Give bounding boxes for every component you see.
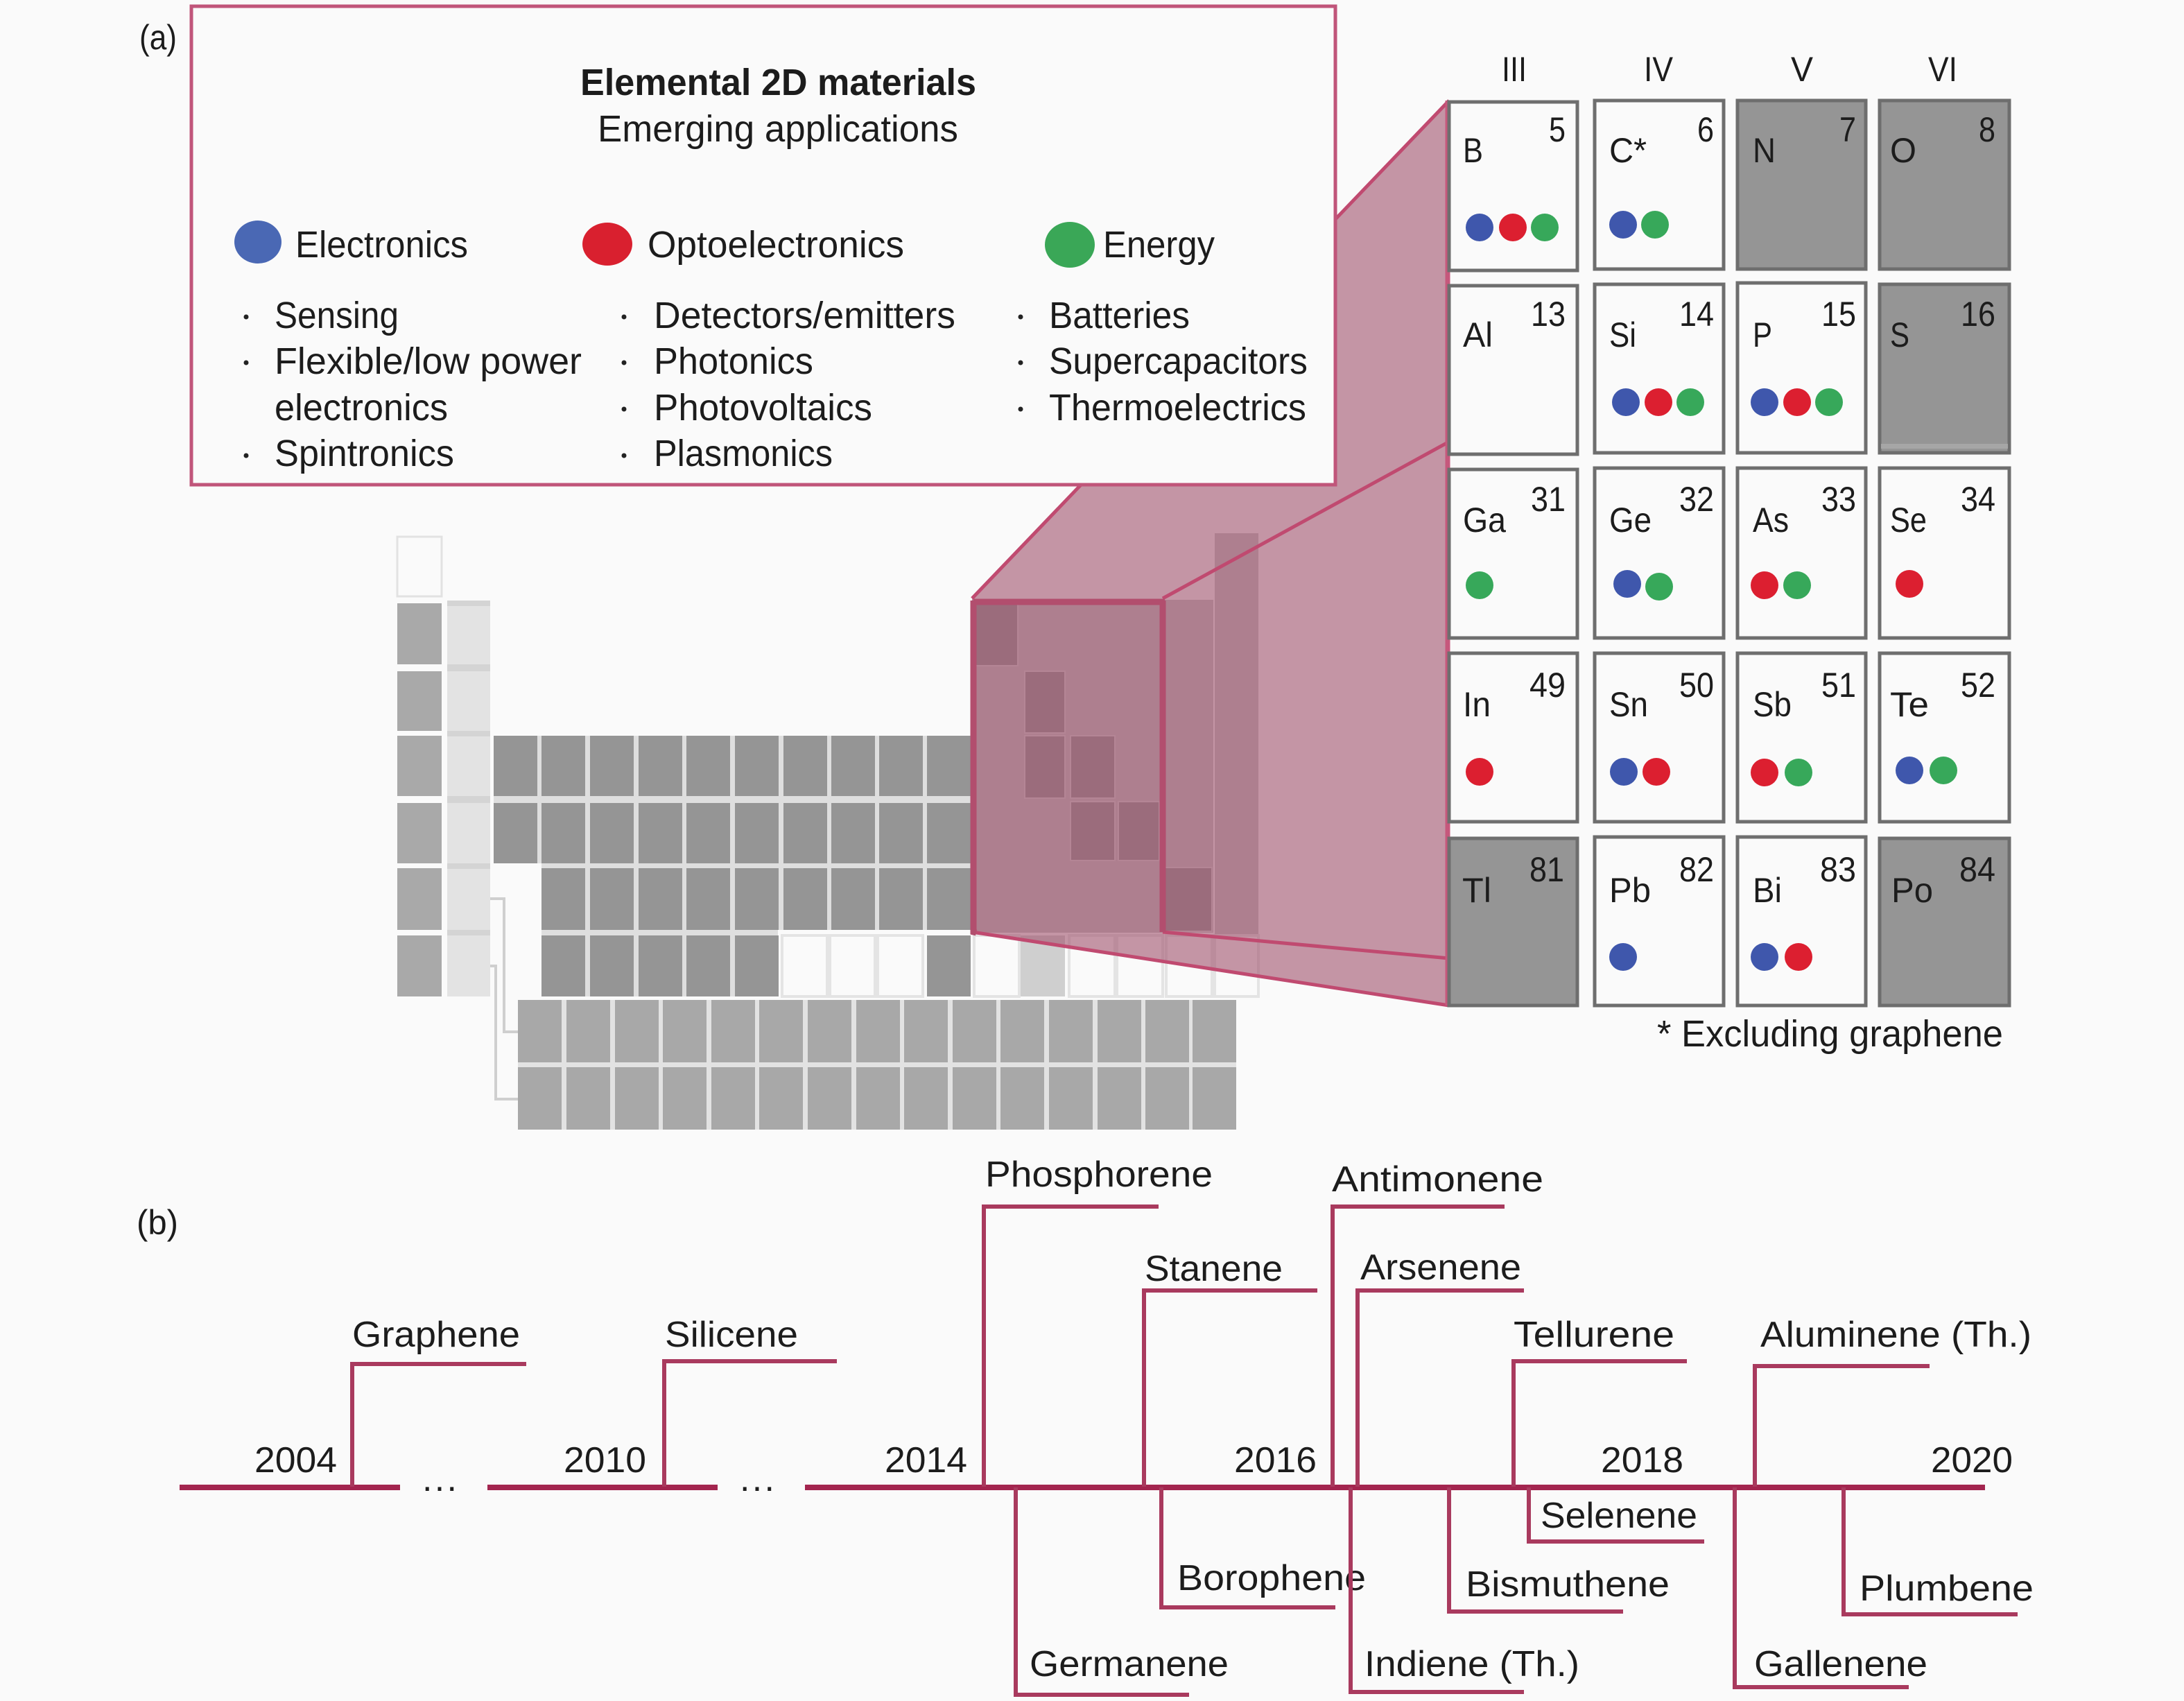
cell: O xyxy=(1880,101,2009,269)
cell: Ge xyxy=(1595,468,1724,638)
marker: Arsenene: Arsenene xyxy=(1360,1247,1521,1288)
year labels: 2004 xyxy=(254,1440,337,1480)
legend: energy: Thermoelectrics xyxy=(1049,387,1306,429)
marker: Gallenene xyxy=(1735,1487,1927,1687)
year labels: 2018 xyxy=(1601,1440,1683,1480)
prism faces xyxy=(972,101,1449,1005)
cell: Si: Si xyxy=(1609,316,1636,354)
legend: energy: Energy xyxy=(1103,224,1215,266)
ellipsis xyxy=(422,1459,774,1499)
panel: legend box xyxy=(191,6,1335,485)
legend: electronics xyxy=(234,221,582,474)
cell: Sb: Sb xyxy=(1753,685,1792,724)
marker: Indiene: Indiene (Th.) xyxy=(1364,1644,1579,1684)
cell: O: 8 xyxy=(1979,110,1995,149)
cell: Sn: Sn xyxy=(1609,685,1648,724)
f-block connector lines xyxy=(490,899,518,1099)
legend: electronics: Electronics xyxy=(295,224,468,266)
ellipsis: ... xyxy=(740,1459,774,1499)
timeline xyxy=(180,1155,2034,1695)
legend: optoelectronics: Plasmonics xyxy=(654,433,833,474)
marker: Silicene xyxy=(664,1315,837,1487)
cell: Si xyxy=(1595,284,1724,453)
marker: Tellurene: Tellurene xyxy=(1514,1315,1674,1355)
cell: Sb: 51 xyxy=(1821,666,1856,705)
cell: Pb: Pb xyxy=(1609,871,1651,910)
group headings III-VI: III xyxy=(1502,50,1527,89)
marker: Gallenene: Gallenene xyxy=(1754,1644,1927,1684)
legend: optoelectronics xyxy=(582,223,955,474)
cell: Tl xyxy=(1449,838,1577,1005)
marker: Bismuthene: Bismuthene xyxy=(1466,1564,1670,1605)
d-block cells xyxy=(494,736,972,996)
cell: As: As xyxy=(1753,501,1789,539)
cell: Sb xyxy=(1737,653,1866,822)
cell: N: N xyxy=(1753,131,1776,170)
element cell grid xyxy=(1449,101,2009,1005)
magnifying prism xyxy=(972,101,1449,1005)
year labels: 2020 xyxy=(1931,1440,2013,1480)
cell: Ga: 31 xyxy=(1531,480,1566,519)
cell: Te xyxy=(1880,653,2009,822)
ellipsis: ... xyxy=(422,1459,457,1499)
label: panel a: (a) xyxy=(139,18,177,57)
f-block grid backing xyxy=(518,1000,1236,1130)
group headings III-VI: VI xyxy=(1928,50,1957,89)
cell: Sn xyxy=(1595,653,1724,822)
cell: C: C* xyxy=(1609,131,1647,170)
legend: optoelectronics: Photonics xyxy=(654,340,813,382)
front frame xyxy=(973,601,1165,933)
year labels: 2016 xyxy=(1234,1440,1317,1480)
marker: Silicene: Silicene xyxy=(665,1315,798,1355)
year labels: 2010 xyxy=(564,1440,646,1480)
marker: Selenene: Selenene xyxy=(1541,1496,1697,1536)
marker: Plumbene: Plumbene xyxy=(1860,1569,2034,1609)
marker: Graphene xyxy=(352,1315,526,1487)
cell: In: 49 xyxy=(1529,666,1566,705)
marker: Antimonene: Antimonene xyxy=(1332,1159,1543,1200)
marker: Germanene xyxy=(1016,1487,1229,1695)
cell: Tl: Tl xyxy=(1462,871,1491,910)
cell: As xyxy=(1737,468,1866,638)
marker: Bismuthene xyxy=(1449,1487,1670,1612)
cell: C: 6 xyxy=(1697,110,1714,149)
axis segments xyxy=(180,1485,1985,1490)
cell: Ge: Ge xyxy=(1609,501,1652,539)
marker: Stanene: Stanene xyxy=(1145,1249,1283,1289)
cell: O: O xyxy=(1890,131,1916,170)
year labels xyxy=(254,1440,2013,1480)
group headings III-VI xyxy=(1502,50,1957,89)
legend: electronics: Sensing xyxy=(275,295,399,336)
group headings III-VI: IV xyxy=(1644,50,1674,89)
cell: Al: Al xyxy=(1463,316,1493,354)
cell: P xyxy=(1737,283,1866,453)
cell: Te: Te xyxy=(1890,685,1929,724)
cell: N: 7 xyxy=(1839,110,1856,149)
marker: Antimonene xyxy=(1332,1159,1543,1487)
marker: Aluminene xyxy=(1755,1315,2031,1487)
heading: Elemental 2D materials xyxy=(580,62,976,103)
p-block underlying cells xyxy=(972,600,1213,933)
legend: energy: Supercapacitors xyxy=(1049,340,1308,382)
label: panel b: (b) xyxy=(137,1203,178,1242)
cell: Sn: 50 xyxy=(1679,666,1714,705)
cell: S: 16 xyxy=(1961,295,1995,334)
cell: C xyxy=(1595,101,1724,269)
cell: Se: 34 xyxy=(1961,480,1995,519)
marker: Graphene: Graphene xyxy=(352,1315,520,1355)
cell: Tl: 81 xyxy=(1529,850,1564,889)
cell: B: 5 xyxy=(1549,110,1566,149)
marker: Germanene: Germanene xyxy=(1030,1644,1229,1684)
marker: Indiene xyxy=(1351,1487,1579,1692)
cell: B xyxy=(1449,102,1577,270)
white cells row 7 xyxy=(782,935,1258,996)
year labels: 2014 xyxy=(885,1440,967,1480)
group headings III-VI: V xyxy=(1791,50,1814,89)
cell: B: B xyxy=(1463,131,1483,170)
marker: Phosphorene: Phosphorene xyxy=(985,1155,1213,1195)
cell: Te: 52 xyxy=(1961,666,1995,705)
marker: Borophene: Borophene xyxy=(1177,1558,1366,1598)
cell: Pb: 82 xyxy=(1679,850,1714,889)
marker: Selenene xyxy=(1529,1487,1704,1542)
marker: Arsenene xyxy=(1358,1247,1524,1487)
legend: optoelectronics: Detectors/emitters xyxy=(654,295,955,336)
legend: optoelectronics: Optoelectronics xyxy=(648,224,904,266)
cell: Po: Po xyxy=(1891,871,1933,910)
cell: P: 15 xyxy=(1821,295,1856,334)
s-block column 2 xyxy=(447,601,490,996)
legend: electronics: Flexible/low power xyxy=(275,340,582,382)
marker: Aluminene: Aluminene (Th.) xyxy=(1760,1315,2031,1355)
marker: Plumbene xyxy=(1844,1487,2034,1614)
cell: P: P xyxy=(1753,316,1772,354)
cell: Ge: 32 xyxy=(1679,480,1714,519)
footnote: * Excluding graphene xyxy=(1657,1013,2003,1055)
legend: electronics: Spintronics xyxy=(275,433,454,474)
periodic table xyxy=(397,533,1258,1130)
f-block cells xyxy=(518,1000,1236,1130)
cell: Po: 84 xyxy=(1959,850,1995,889)
cell: Si: 14 xyxy=(1679,295,1714,334)
cell: Pb xyxy=(1595,837,1724,1005)
cell: Po xyxy=(1880,838,2009,1005)
cell: Bi: 83 xyxy=(1820,850,1856,889)
marker: Stanene xyxy=(1144,1249,1317,1487)
prism edges xyxy=(972,101,1449,1005)
cell: N xyxy=(1737,101,1866,269)
cell: Bi xyxy=(1737,837,1866,1005)
marker: Phosphorene xyxy=(984,1155,1213,1487)
marker: Borophene xyxy=(1161,1487,1366,1607)
cell: Al: 13 xyxy=(1531,295,1566,334)
d-block grid backing xyxy=(494,736,972,996)
legend: energy xyxy=(1018,222,1308,429)
cell: As: 33 xyxy=(1821,480,1856,519)
cell: Bi: Bi xyxy=(1753,871,1782,910)
marker: Tellurene xyxy=(1514,1315,1687,1487)
subheading: Emerging applications xyxy=(598,108,958,150)
cell: In xyxy=(1449,653,1577,822)
legend: energy: Batteries xyxy=(1049,295,1190,336)
cell: Ga xyxy=(1449,469,1577,638)
cell: S: S xyxy=(1890,316,1909,354)
cell: S xyxy=(1880,284,2009,453)
legend: optoelectronics: Photovoltaics xyxy=(654,387,872,429)
cell: In: In xyxy=(1463,685,1491,724)
cell: Se: Se xyxy=(1890,501,1927,539)
cell: Al xyxy=(1449,286,1577,454)
legend: electronics: electronics xyxy=(275,387,448,429)
cell: Ga: Ga xyxy=(1463,501,1506,539)
cell: Se xyxy=(1880,468,2009,638)
s-block column 1 xyxy=(397,537,442,996)
